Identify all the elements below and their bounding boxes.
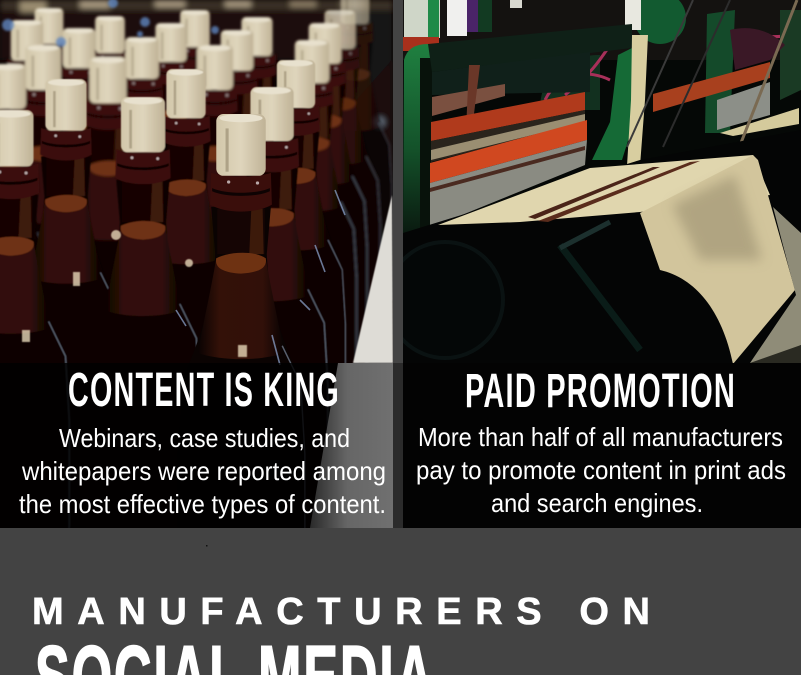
- panel divider: [393, 0, 403, 528]
- caption overlay: left: [0, 363, 393, 528]
- text block: paid promotion: [416, 422, 786, 518]
- section title: manufacturers on: MANUFACTURERS ON: [32, 591, 650, 633]
- text block: content is king: [19, 423, 386, 519]
- photo: textile loom: [403, 0, 801, 363]
- main frame: [403, 44, 432, 233]
- heading: content is king: CONTENT IS KING: [68, 364, 340, 417]
- glass reflections: [22, 230, 247, 357]
- text block: content is king: the most effective types of content.: [19, 489, 386, 519]
- grey floor: [750, 207, 801, 363]
- front bottle: [196, 114, 306, 528]
- text block: content is king: Webinars, case studies, and: [59, 423, 350, 453]
- caption overlay: right: [403, 363, 801, 528]
- blurred background of the bottle rows: [0, 0, 393, 176]
- loom background: [403, 0, 801, 60]
- middle row bottles: [0, 59, 347, 528]
- red bars and warp: [431, 92, 585, 141]
- brown bars on cloth: [528, 167, 660, 219]
- yarn column: [627, 35, 648, 166]
- background machinery behind frame: [432, 52, 590, 95]
- back row bottles: [0, 0, 393, 363]
- floor beside the bottles: [353, 195, 393, 363]
- text block: paid promotion: and search engines.: [491, 488, 703, 518]
- glass highlights: [176, 190, 345, 365]
- floor seen through the overlay: [310, 363, 393, 528]
- lower machinery: [404, 140, 744, 233]
- photo: rows of corked brown bottles: [0, 0, 393, 528]
- flat cloth: [438, 155, 770, 225]
- background yarn: [540, 55, 600, 110]
- second loom on the right: [705, 10, 735, 133]
- bokeh highlights: [2, 0, 219, 47]
- draped cloth sheet: [640, 155, 795, 364]
- guide rods: [627, 0, 797, 153]
- text block: content is king: whitepapers were reported among: [21, 456, 386, 486]
- small speck: [206, 545, 208, 546]
- flywheel: [387, 242, 503, 358]
- caption overlay: divider: [393, 363, 403, 528]
